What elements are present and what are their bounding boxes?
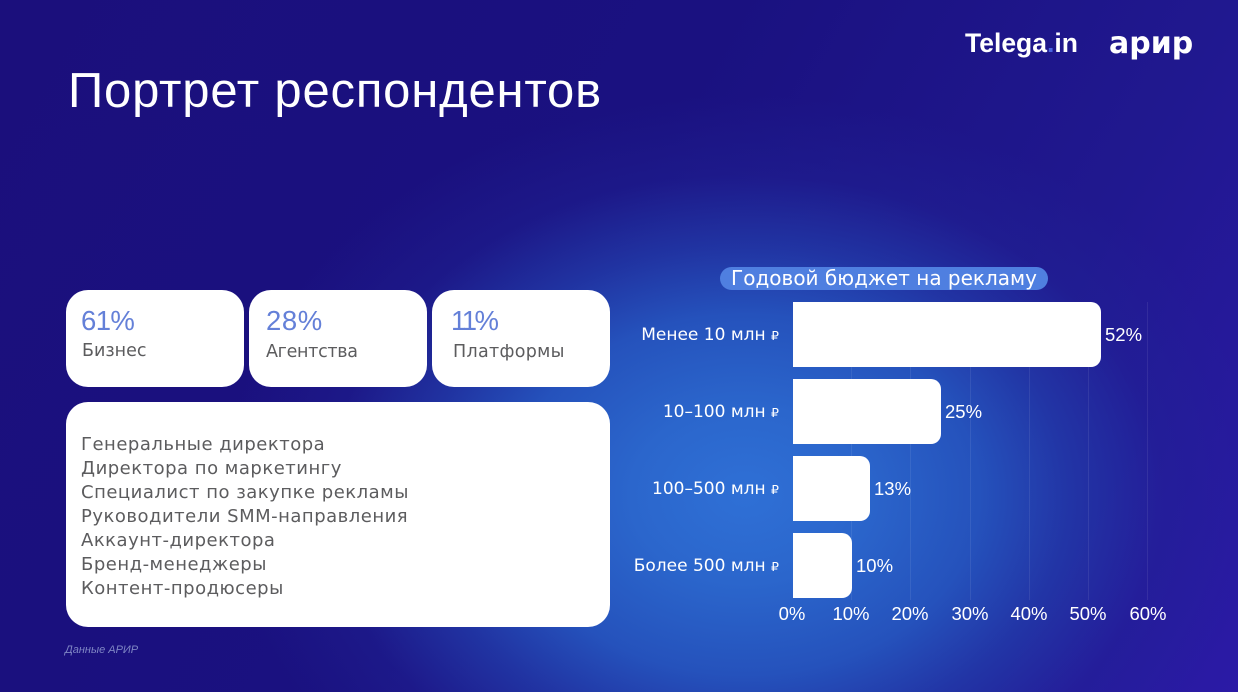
value label: 10% xyxy=(856,555,893,576)
role list xyxy=(81,434,409,599)
x axis tick: 60% xyxy=(1129,603,1167,624)
label: Бизнес xyxy=(82,341,147,361)
x axis tick: 40% xyxy=(1010,603,1048,624)
bar: over 500m xyxy=(793,533,852,598)
label: Платформы xyxy=(453,342,565,362)
bar: under 10m xyxy=(793,302,1101,367)
x axis tick: 30% xyxy=(951,603,989,624)
category label: Более 500 млн ₽ xyxy=(634,556,779,576)
value label: 52% xyxy=(1105,324,1142,345)
stat card: platforms xyxy=(432,290,610,387)
x axis tick: 10% xyxy=(832,603,870,624)
x axis tick: 50% xyxy=(1069,603,1107,624)
value: 61% xyxy=(81,305,134,336)
category label: Менее 10 млн ₽ xyxy=(641,325,779,345)
value label: 25% xyxy=(945,401,982,422)
logo: АРИР: арир xyxy=(1109,26,1193,61)
label: Агентства xyxy=(266,342,358,362)
logo: Telega.in: Telega.in xyxy=(965,28,1078,58)
role list: Директора по маркетингу xyxy=(81,458,342,479)
role list: Бренд-менеджеры xyxy=(81,554,267,575)
role list: Аккаунт-директора xyxy=(81,530,275,551)
category label: 10–100 млн ₽ xyxy=(663,402,779,422)
stat card: business xyxy=(66,290,244,387)
value: 28% xyxy=(266,305,323,336)
source note: Данные АРИР xyxy=(65,644,138,656)
bar: 100-500m xyxy=(793,456,870,521)
category label: 100–500 млн ₽ xyxy=(652,479,779,499)
role list: Генеральные директора xyxy=(81,434,325,455)
role list: Контент-продюсеры xyxy=(81,578,284,599)
role list: Специалист по закупке рекламы xyxy=(81,482,409,503)
bar: 10-100m xyxy=(793,379,941,444)
x axis tick: 20% xyxy=(891,603,929,624)
chart heading: Годовой бюджет на рекламу xyxy=(731,266,1037,290)
x axis tick: 0% xyxy=(779,603,805,624)
value label: 13% xyxy=(874,478,911,499)
stat card: agencies xyxy=(249,290,427,387)
title: Портрет респондентов xyxy=(68,64,602,118)
panel: respondent roles xyxy=(66,402,610,627)
role list: Руководители SMM-направления xyxy=(81,506,408,527)
value: 11% xyxy=(451,305,496,336)
